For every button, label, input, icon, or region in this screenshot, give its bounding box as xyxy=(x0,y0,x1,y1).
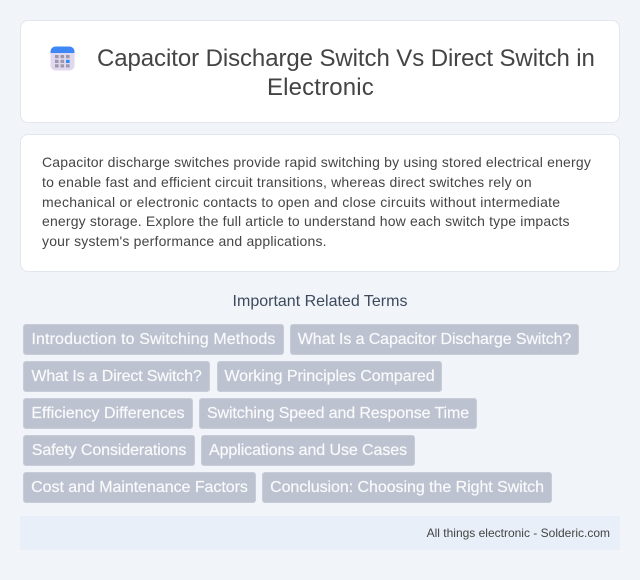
text block: description: your system's performance and applications. xyxy=(42,233,327,249)
tag list xyxy=(23,324,579,503)
tag xyxy=(23,435,195,466)
tag: Applications and Use Cases xyxy=(209,442,407,459)
tag: What Is a Direct Switch? xyxy=(31,368,202,385)
tag: Cost and Maintenance Factors xyxy=(31,479,248,496)
tag: Safety Considerations xyxy=(32,442,186,459)
tag: What Is a Capacitor Discharge Switch? xyxy=(298,331,571,348)
text block: description: energy storage. Explore the full article to understand how each switch type impacts xyxy=(42,213,570,229)
title xyxy=(97,45,595,101)
tag xyxy=(23,361,210,392)
tag: Conclusion: Choosing the Right Switch xyxy=(270,479,544,496)
title: Capacitor Discharge Switch Vs Direct Switch in xyxy=(97,45,595,72)
tag xyxy=(199,398,477,429)
tag xyxy=(23,324,284,355)
tag xyxy=(262,472,552,503)
icon: calendar grid xyxy=(50,46,74,70)
panel: title card xyxy=(20,20,620,123)
heading: important related terms: Important Related Terms xyxy=(233,293,407,310)
tag xyxy=(23,398,193,429)
panel: description card xyxy=(20,134,620,272)
tag: Working Principles Compared xyxy=(224,368,435,385)
text block: description xyxy=(42,154,591,249)
tag: Introduction to Switching Methods xyxy=(31,331,276,348)
text block: description: mechanical or electronic contacts to open and close circuits without intermediate xyxy=(42,194,560,210)
tag xyxy=(290,324,579,355)
footer xyxy=(20,516,620,550)
tag xyxy=(201,435,415,466)
tag xyxy=(217,361,442,392)
text block: description: Capacitor discharge switches provide rapid switching by using stored electrical energy xyxy=(42,154,591,170)
tag: Efficiency Differences xyxy=(31,405,185,422)
tag xyxy=(23,472,256,503)
footer: All things electronic - Solderic.com xyxy=(427,526,610,540)
text block: description: to enable fast and efficient circuit transitions, whereas direct switches rely on xyxy=(42,174,532,190)
title: Electronic xyxy=(267,74,374,101)
tag: Switching Speed and Response Time xyxy=(207,405,469,422)
